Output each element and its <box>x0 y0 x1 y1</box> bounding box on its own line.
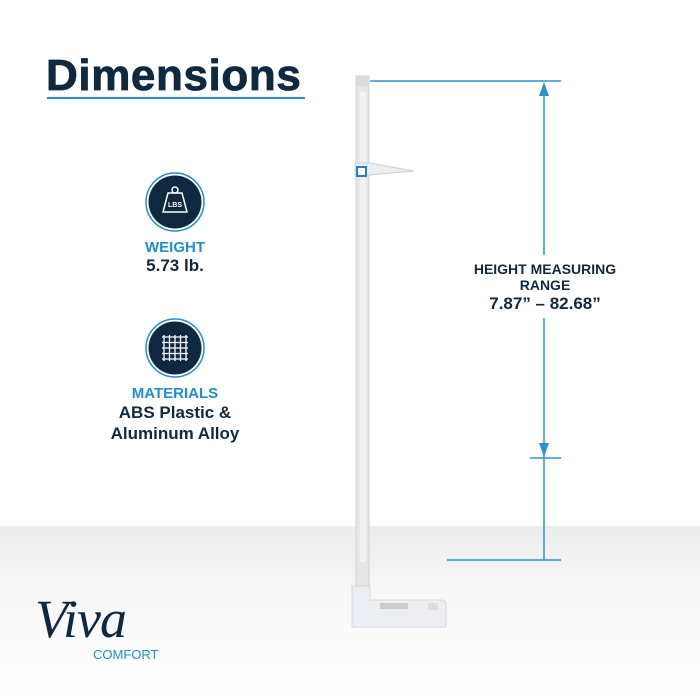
logo <box>35 589 158 662</box>
materials label: MATERIALS <box>132 385 218 402</box>
materials block <box>111 318 240 443</box>
icon: weight: LBS <box>168 202 182 209</box>
height measuring range label: 7.87” – 82.68” <box>489 294 601 313</box>
materials value: Aluminum Alloy <box>111 424 239 443</box>
logo: COMFORT <box>93 647 158 662</box>
weight label: WEIGHT <box>145 239 205 256</box>
stadiometer <box>352 76 446 628</box>
height measuring range label <box>474 261 616 313</box>
title: Dimensions <box>46 51 301 100</box>
title underline <box>47 97 305 99</box>
floor background <box>0 526 700 700</box>
icon: weight <box>145 172 205 232</box>
materials value <box>111 403 240 443</box>
weight block <box>145 172 205 275</box>
height measuring range label: HEIGHT MEASURING <box>474 261 616 277</box>
height measuring range label: RANGE <box>520 277 570 293</box>
logo: Viva <box>35 589 126 649</box>
weight value: 5.73 lb. <box>146 256 204 275</box>
materials value: ABS Plastic & <box>119 403 231 422</box>
icon: grid <box>145 318 205 378</box>
